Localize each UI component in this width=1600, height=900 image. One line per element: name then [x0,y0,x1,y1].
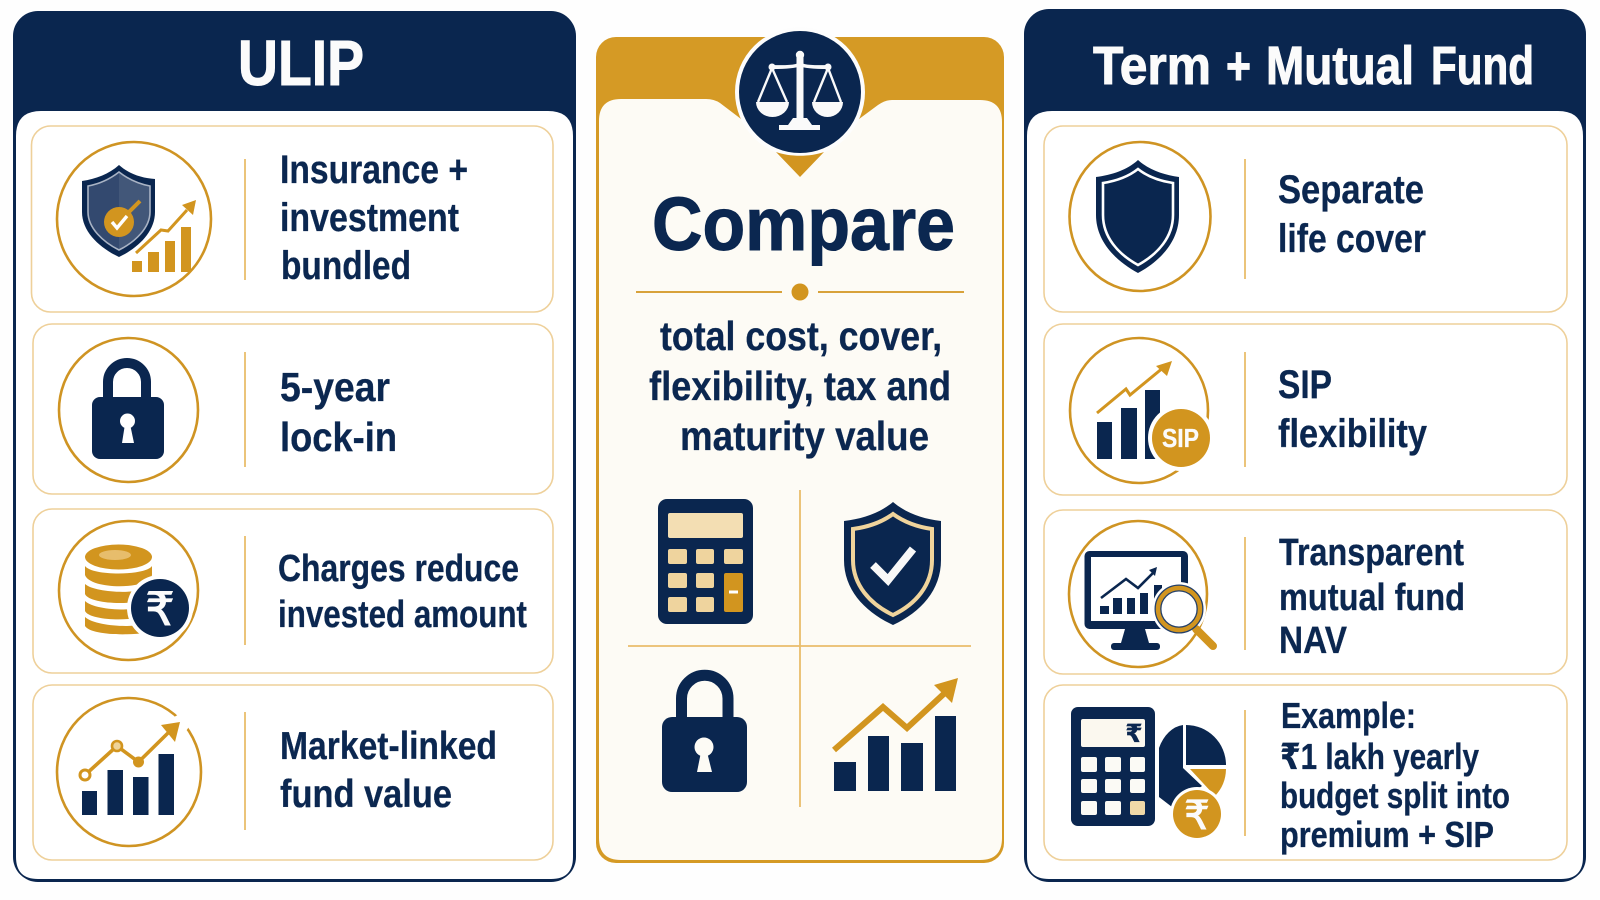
text: insurance + investment bundled: bundled [281,244,411,288]
card: insurance + investment [32,126,553,312]
text: separate life cover: Separate [1278,168,1424,212]
icon: monitor with magnifier [1069,521,1213,667]
card: separate life cover [1044,126,1567,312]
card: SIP flexibility [1044,324,1567,495]
card: transparent NAV [1044,510,1567,674]
text: SIP flexibility [1278,363,1428,456]
text: 5-year lock-in: lock-in [280,414,397,460]
icon: padlock [59,338,198,482]
text: charges reduce invested amount [278,548,527,636]
text: transparent mutual fund NAV: mutual fund [1279,577,1465,619]
text: charges reduce invested amount: Charges reduce [278,548,519,590]
text: 5-year lock-in [280,364,397,460]
text: insurance + investment bundled [280,148,468,288]
text: example budget split: Example: [1281,695,1416,736]
text: SIP flexibility: SIP [1278,363,1332,407]
text: example budget split: premium + SIP [1280,814,1494,855]
text: transparent mutual fund NAV [1279,532,1465,662]
text: example budget split: ₹1 lakh yearly [1280,736,1479,777]
icon: SIP chart [1070,338,1214,483]
text: example budget split [1280,695,1510,855]
panel: Compare [596,27,1004,863]
card: lock-in [33,324,553,494]
text: market-linked fund value: Market-linked [280,725,497,768]
text: example budget split: budget split into [1280,775,1510,816]
icon: lock [662,675,747,792]
heading: ULIP: ULIP [238,27,364,99]
heading: Term + Mutual Fund [1093,36,1534,96]
text: compare criteria: total cost, cover, [660,313,942,359]
text: market-linked fund value [280,725,497,816]
text: transparent mutual fund NAV: NAV [1279,620,1348,662]
panel background [1024,9,1586,882]
text: 5-year lock-in: 5-year [280,364,390,410]
icon: coin stack with rupee: ₹ [145,583,175,635]
icon: shield with growth chart [57,142,211,296]
text: separate life cover: life cover [1278,217,1426,261]
icon: calculator and pie [1071,707,1226,841]
heading: Compare: Compare [652,182,955,266]
icon: balance scales badge [735,27,865,177]
icon: shield with check [844,502,941,625]
card: market-linked [33,685,553,860]
icon: growth chart [834,678,958,791]
text: separate life cover [1278,168,1426,261]
icon: calculator and pie: ₹ [1125,720,1143,748]
text: transparent mutual fund NAV: Transparent [1279,532,1464,574]
panel background [13,11,576,882]
text: insurance + investment bundled: investment [280,196,459,240]
panel background [596,37,1004,863]
icon: calculator and pie: ₹ [1184,794,1210,838]
text: compare criteria [649,313,951,459]
text: compare criteria: flexibility, tax and [649,363,951,409]
card: charges [33,509,553,673]
card: example budget [1044,685,1567,860]
icon: calculator [658,499,753,624]
icon: shield [1070,142,1210,291]
icon: SIP chart: SIP [1162,423,1199,453]
heading: Term + Mutual Fund: Fund [1431,36,1534,96]
heading: Term + Mutual Fund: + [1226,36,1251,96]
text: market-linked fund value: fund value [280,773,452,816]
icon: market chart [57,698,201,846]
icon: coin stack with rupee [59,521,198,660]
divider with dot [636,284,964,300]
heading: Term + Mutual Fund: Mutual [1266,36,1414,96]
text: charges reduce invested amount: invested amount [278,594,527,636]
text: insurance + investment bundled: Insurance + [280,148,468,192]
panel: Term + Mutual Fund [1024,9,1586,882]
panel: ULIP [13,11,576,882]
heading: Term + Mutual Fund: Term [1093,36,1211,96]
text: compare criteria: maturity value [680,413,929,459]
text: SIP flexibility: flexibility [1278,412,1428,456]
